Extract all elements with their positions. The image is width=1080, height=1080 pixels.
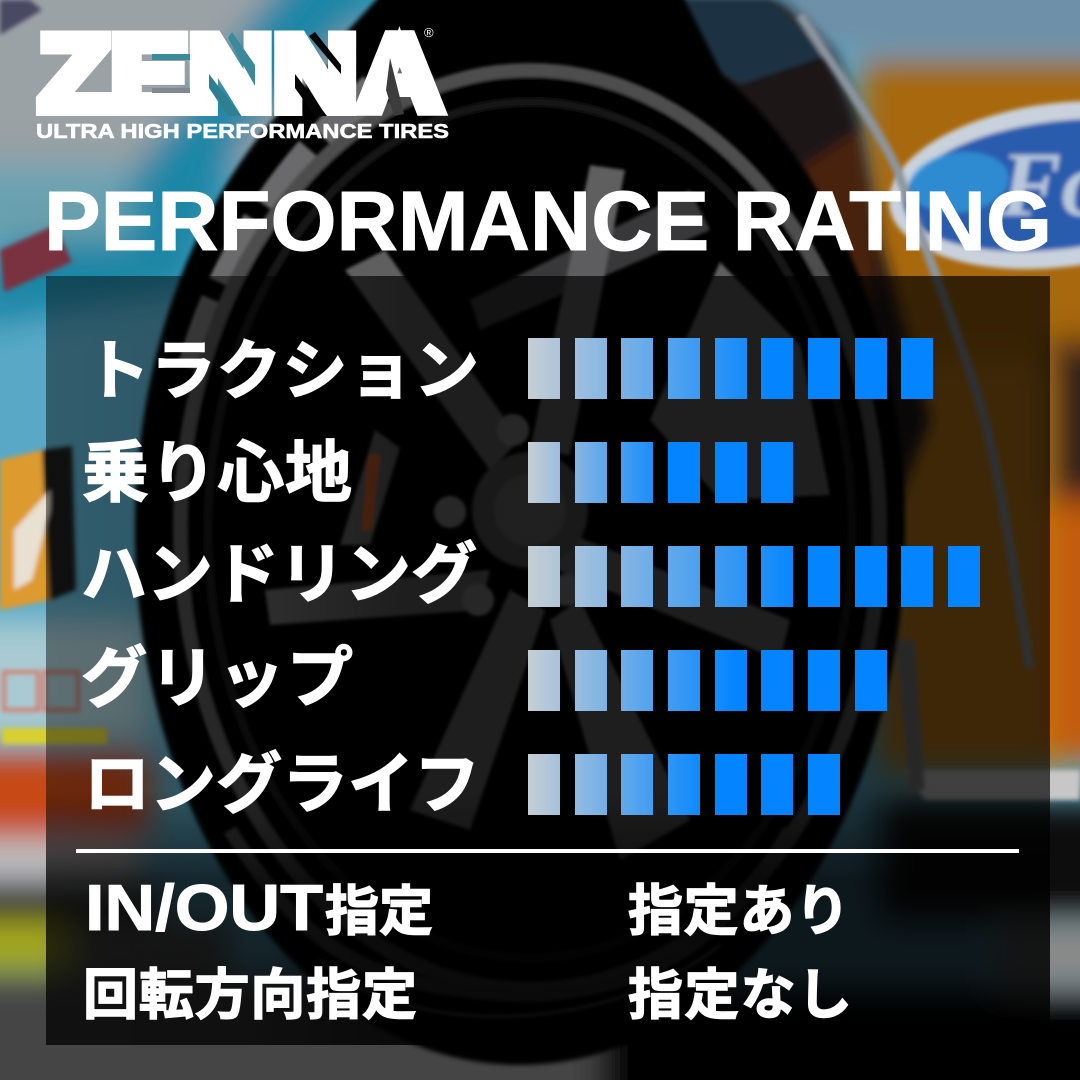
dark translucent panel xyxy=(46,276,1050,1045)
car fender and arch xyxy=(650,0,930,520)
wheel spokes, hub and brake caliper xyxy=(230,165,830,1016)
handling bars: 10 xyxy=(528,546,980,607)
rating row: handling: ハンドリング xyxy=(81,521,477,617)
rating row: traction: トラクション xyxy=(85,318,479,412)
sidewall lettering band xyxy=(200,60,420,370)
rating row: ride comfort xyxy=(82,419,793,516)
logo: ZENNA Ultra High Performance Tires: ZENNA xyxy=(39,13,442,133)
rating row: handling xyxy=(81,521,980,617)
rating row: grip: グリップ xyxy=(81,625,353,721)
rating row: traction xyxy=(85,318,933,412)
grip bars: 8 xyxy=(528,650,887,711)
spec row: in/out designation: 指定あり xyxy=(628,866,850,946)
spec row: in/out designation: 指定 xyxy=(325,867,433,946)
left stickers xyxy=(0,0,107,744)
traction bars: 9 xyxy=(528,338,933,399)
logo: ZENNA Ultra High Performance Tires: ULTRA HIGH PERFORMANCE TIRES xyxy=(36,120,449,143)
spec row: rotation direction designation xyxy=(83,950,852,1030)
spec row: in/out designation xyxy=(85,866,850,946)
spec row: rotation direction designation: 回転方向指定 xyxy=(83,950,417,1030)
rating row: grip xyxy=(81,625,887,721)
logo: ZENNA Ultra High Performance Tires: ® xyxy=(424,25,434,40)
rating row: ride comfort: 乗り心地 xyxy=(82,419,352,516)
spec row: in/out designation: IN/OUT xyxy=(85,871,323,944)
rating row: long life xyxy=(84,731,840,827)
long life bars: 7 xyxy=(528,754,840,815)
Ford oval xyxy=(879,83,1080,287)
title: PERFORMANCE RATING xyxy=(44,174,1052,268)
spec row: rotation direction designation: 指定なし xyxy=(628,950,852,1030)
ride comfort bars: 6 xyxy=(528,442,793,503)
rating row: long life: ロングライフ xyxy=(84,731,480,827)
tire xyxy=(135,0,905,1065)
